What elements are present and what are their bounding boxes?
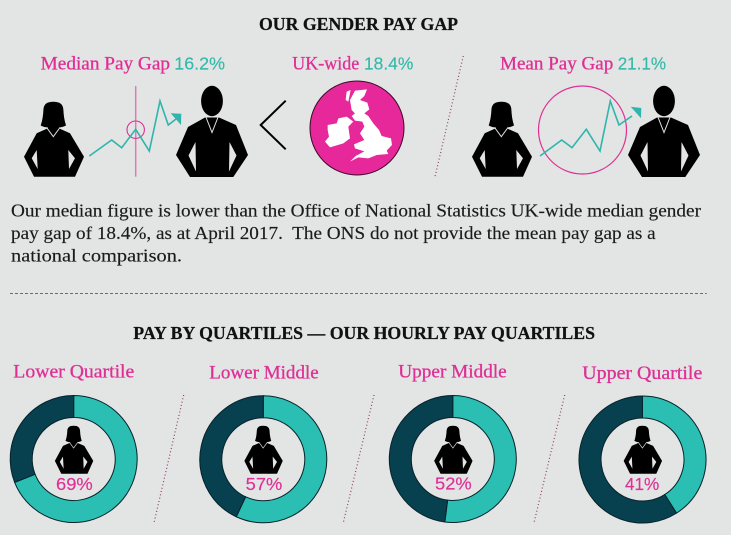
panel: upper middle: Upper Middle bbox=[398, 362, 507, 383]
label: mean pay gap bbox=[500, 53, 666, 74]
panel: upper middle bbox=[389, 362, 516, 522]
divider: slanted dotted line 1 bbox=[154, 395, 184, 523]
chart: median line with marker bbox=[89, 86, 181, 177]
text block: explanation: Our median figure is lower than the Office of National Statistics UK-wide median gender bbox=[11, 200, 701, 220]
label: median pay gap bbox=[41, 53, 225, 74]
text block: explanation: national comparison. bbox=[11, 246, 182, 266]
panel: upper quartile bbox=[579, 363, 706, 523]
panel: lower quartile: 69% bbox=[56, 474, 93, 494]
icon: woman, median bbox=[24, 102, 84, 177]
label: median pay gap: Median Pay Gap bbox=[41, 53, 170, 74]
label: mean pay gap: Mean Pay Gap bbox=[500, 53, 613, 74]
divider: slanted dotted line 3 bbox=[534, 395, 565, 523]
panel: lower quartile: Lower Quartile bbox=[13, 362, 134, 383]
panel: upper quartile: 41% bbox=[625, 474, 659, 494]
heading: pay by quartiles: PAY BY QUARTILES — OUR HOURLY PAY QUARTILES bbox=[133, 323, 595, 343]
panel: lower middle: Lower Middle bbox=[209, 362, 319, 383]
panel: lower middle bbox=[200, 362, 327, 523]
panel: lower middle: 57% bbox=[246, 474, 282, 494]
label: UK-wide bbox=[292, 53, 413, 74]
chart: mean line in circle bbox=[538, 86, 641, 174]
panel: upper quartile: Upper Quartile bbox=[582, 363, 702, 384]
text block: explanation: pay gap of 18.4%, as at April 2017. The ONS do not provide the mean pay gap as a bbox=[11, 223, 656, 243]
icon: man, mean bbox=[628, 86, 700, 177]
heading: our gender pay gap: OUR GENDER PAY GAP bbox=[259, 14, 458, 34]
divider: slanted dotted line, top bbox=[435, 56, 463, 177]
text block: explanation bbox=[11, 200, 701, 266]
icon: UK map circle bbox=[310, 81, 404, 175]
icon: less-than sign bbox=[261, 101, 286, 149]
panel: upper middle: 52% bbox=[435, 473, 472, 493]
label: UK-wide: UK-wide bbox=[292, 53, 359, 74]
icon: woman, mean bbox=[472, 102, 532, 177]
panel: lower quartile bbox=[10, 362, 137, 522]
label: mean pay gap: 21.1% bbox=[618, 53, 666, 73]
label: UK-wide: 18.4% bbox=[364, 53, 413, 73]
label: median pay gap: 16.2% bbox=[174, 53, 225, 73]
icon: man, median bbox=[176, 86, 248, 177]
divider: slanted dotted line 2 bbox=[343, 395, 374, 523]
